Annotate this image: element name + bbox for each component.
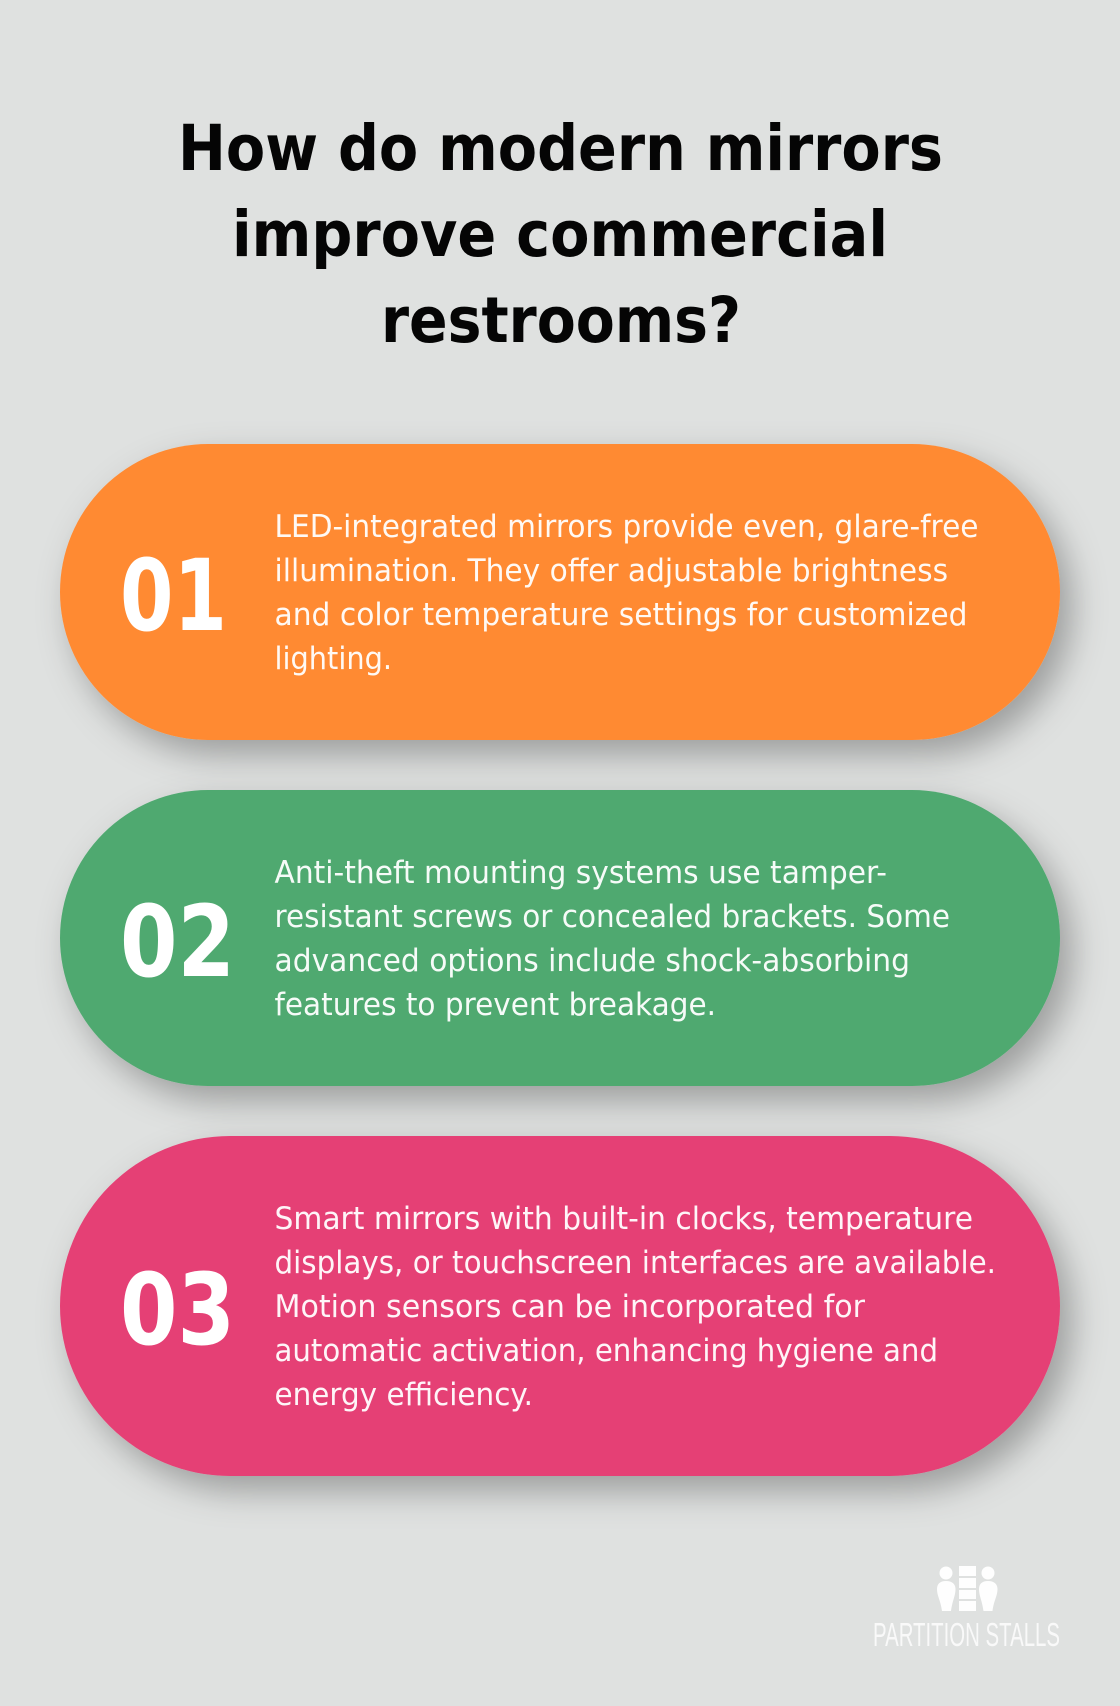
description 03 bbox=[274, 1201, 996, 1413]
pink pill background bbox=[60, 1136, 1060, 1476]
panel: step 02 bbox=[60, 790, 1060, 1086]
number 01: 01 bbox=[120, 539, 227, 654]
description 02 bbox=[274, 855, 950, 1023]
description 03: Smart mirrors with built-in clocks, temperature bbox=[274, 1201, 973, 1237]
panel: step 03 bbox=[60, 1136, 1060, 1476]
orange pill background bbox=[60, 444, 1060, 740]
icon: two people and partition bbox=[937, 1566, 998, 1611]
description 01 bbox=[274, 509, 978, 677]
description 01: and color temperature settings for customized bbox=[274, 597, 968, 633]
description 01: illumination. They offer adjustable brightness bbox=[274, 553, 948, 589]
number 02: 02 bbox=[120, 885, 235, 1000]
description 02: Anti-theft mounting systems use tamper- bbox=[274, 855, 887, 891]
description 03: Motion sensors can be incorporated for bbox=[274, 1289, 865, 1325]
title: improve commercial bbox=[232, 198, 888, 271]
title bbox=[178, 112, 943, 357]
description 02: advanced options include shock-absorbing bbox=[274, 943, 910, 979]
panel: step 01 bbox=[60, 444, 1060, 740]
logo: Partition Stalls bbox=[873, 1566, 1060, 1653]
description 02: resistant screws or concealed brackets. Some bbox=[274, 899, 950, 935]
title: restrooms? bbox=[381, 284, 741, 357]
description 01: lighting. bbox=[274, 641, 392, 677]
description 03: automatic activation, enhancing hygiene and bbox=[274, 1333, 938, 1369]
green pill background bbox=[60, 790, 1060, 1086]
title: How do modern mirrors bbox=[178, 112, 943, 185]
description 03: energy efficiency. bbox=[274, 1377, 533, 1413]
description 02: features to prevent breakage. bbox=[274, 987, 716, 1023]
number 03: 03 bbox=[120, 1253, 235, 1368]
description 03: displays, or touchscreen interfaces are available. bbox=[274, 1245, 996, 1281]
description 01: LED-integrated mirrors provide even, glare-free bbox=[274, 509, 978, 545]
